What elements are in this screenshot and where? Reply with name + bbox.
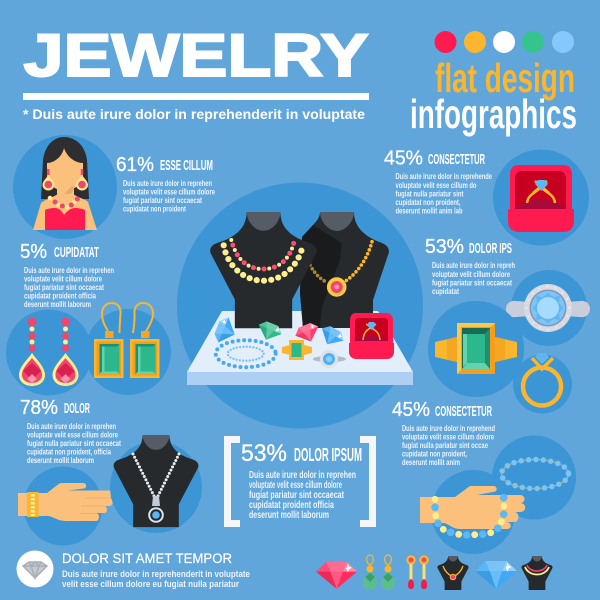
footer badge: white circle with diamond	[16, 550, 54, 588]
right bust with gold necklace	[300, 212, 389, 328]
icon: right drop earring	[52, 318, 78, 386]
stat: 78% dolor: voluptate velit esse cillum dolore	[27, 430, 118, 440]
small ring box	[349, 313, 394, 359]
stat: 45% consectetur top: deserunt mollit anim lab	[396, 206, 463, 216]
stat: 45% consectetur bottom: deserunt mollit anim	[402, 458, 460, 467]
icon: left emerald earring	[94, 303, 124, 378]
footer icon: red diamond	[316, 562, 357, 589]
stat: 78% dolor: DOLOR	[64, 401, 90, 417]
left bust with bead necklaces	[210, 212, 317, 328]
bracket: left	[224, 436, 240, 527]
icon: hand	[420, 486, 525, 529]
panel: centre display	[177, 182, 423, 428]
bracket: right	[360, 436, 376, 527]
panel: emerald earrings	[85, 303, 171, 395]
stat: 45% consectetur bottom: 45%	[392, 399, 430, 421]
icon: diamond ring	[506, 284, 590, 332]
footer icon: pink earring right	[419, 555, 429, 589]
panel: hand with gold bracelet	[18, 466, 113, 546]
stat: 53% dolor ips: voluptate velit cillum dolore	[432, 270, 510, 279]
panel: gold ring	[513, 353, 572, 414]
stat: 53% dolor ipsum: cupidatat proident officia	[249, 500, 334, 511]
stat: 53% dolor ips: DOLOR IPS	[469, 241, 512, 257]
panel: woman	[13, 135, 215, 239]
footer heading: DOLOR SIT AMET TEMPOR	[62, 551, 232, 566]
panel: diamond ring	[506, 270, 590, 346]
stat: 78% dolor: 78%	[20, 397, 58, 419]
stat: 53% dolor ips	[425, 236, 515, 296]
stat: 5% cupidatat: deserunt mollit laborum	[24, 300, 91, 309]
icon: left drop earring	[19, 318, 45, 386]
table	[187, 311, 413, 385]
stat: 53% dolor ipsum: DOLOR IPSUM	[294, 445, 362, 465]
stat: 53% dolor ipsum: 53%	[241, 440, 287, 467]
stat: 45% consectetur top: 45%	[384, 148, 423, 170]
stat: 61% esse cillum: 61%	[116, 154, 154, 176]
footer icon: blue diamond	[475, 561, 517, 589]
stat: 5% cupidatat: voluptate velit cillum dolore	[24, 274, 102, 284]
stat: 78% dolor: deserunt mollit laborum	[27, 456, 94, 465]
footer icon: pink earring left	[406, 555, 416, 589]
stat: 61% esse cillum: cupidatat non proident	[123, 204, 186, 214]
gem: pink	[293, 321, 322, 346]
stat: 45% consectetur top	[384, 148, 492, 216]
stat: 45% consectetur bottom: Duis aute irure dolor in reprehend	[402, 424, 495, 433]
icon: gold ring	[523, 353, 561, 406]
stat: 53% dolor ips: Duis aute irure dolor in repreh	[432, 261, 515, 270]
gem: blue left	[212, 315, 240, 347]
gem: blue right	[316, 323, 346, 350]
subtitle: * Duis aute irure dolor in reprehenderit in voluptate	[23, 107, 366, 122]
footer icon: bust with bead necklaces	[521, 556, 553, 590]
stat: 61% esse cillum: Duis aute irure dolor in reprehen	[123, 179, 212, 188]
stat: 78% dolor	[20, 397, 121, 465]
icon: gold bracelet	[27, 492, 38, 517]
gem: green	[254, 319, 284, 344]
stat: 61% esse cillum: fugiat pariatur sint occaecat	[123, 196, 202, 205]
stat: 53% dolor ips: cupidatat	[432, 287, 459, 296]
stat: 61% esse cillum: ESSE CILLUM	[160, 158, 213, 174]
panel: silver necklace on bust	[110, 435, 202, 533]
panel: emerald ring	[428, 301, 524, 397]
icon: oval bracelet	[502, 460, 568, 488]
stat: 5% cupidatat: CUPIDATAT	[54, 245, 99, 261]
colour palette dots	[434, 31, 574, 53]
footer icon: bust with gold necklace	[437, 556, 469, 590]
stat: 45% consectetur bottom: voluptate velit esse cillum dolore	[402, 432, 494, 442]
stat: 61% esse cillum	[116, 154, 215, 214]
title rule	[23, 93, 369, 100]
stat: 5% cupidatat	[20, 241, 114, 309]
stat: 45% consectetur top: Duis aute irure dolor in reprehende	[396, 172, 492, 181]
stat: 45% consectetur bottom	[392, 399, 495, 467]
panel: bead bracelet	[492, 436, 576, 520]
icon: ring box	[508, 165, 574, 232]
stat: 5% cupidatat: Duis aute irure dolor in reprehen	[24, 266, 114, 275]
footer icon: green earring left	[363, 555, 377, 590]
icon: emerald ring	[435, 323, 517, 374]
stat: 53% dolor ips: 53%	[425, 236, 464, 258]
footer icon: green earring right	[381, 555, 395, 590]
stat: 53% dolor ips: fugiat pariatur sint occaecat	[432, 278, 512, 288]
icon: woman with jewelry	[33, 137, 97, 230]
stat: 45% consectetur top: CONSECTETUR	[428, 152, 485, 168]
icon: right emerald earring	[130, 303, 160, 378]
footer text	[62, 569, 250, 590]
icon: chain and pendant	[133, 454, 179, 522]
stat: 78% dolor: fugiat nulla pariatur sint occaecat	[27, 439, 121, 448]
small emerald ring	[282, 340, 312, 360]
small diamond ring	[313, 350, 346, 368]
stat: 53% dolor ipsum	[241, 440, 362, 521]
title: JEWELRY	[24, 22, 368, 89]
stat: 53% dolor ipsum: fugiat pariatur sint occaecat	[249, 490, 344, 501]
stat: 45% consectetur top: fugiat nulla pariatur sint	[396, 190, 464, 198]
stat: 45% consectetur top: voluptate velit esse cillum do	[396, 181, 477, 190]
stat: 78% dolor: cupidatat non proident, officia	[27, 448, 111, 456]
icon: bust	[114, 435, 198, 527]
stat: 61% esse cillum: voluptate velit esse cillum dolore	[123, 188, 215, 196]
stat: 45% consectetur bottom: fugiat nulla pariatur sint occae	[402, 441, 488, 450]
stat: 5% cupidatat: cupidatat proident officia	[24, 292, 96, 300]
panel: hand with bead bracelet	[420, 470, 525, 554]
stat: 53% dolor ipsum: voluptate velit esse cillum dolore	[249, 480, 342, 491]
stat: 5% cupidatat: 5%	[20, 241, 47, 263]
bracelet on table	[216, 340, 276, 367]
stat: 45% consectetur bottom: CONSECTETUR	[435, 404, 492, 420]
stat: 5% cupidatat: fugiat pariatur sint occaecat	[24, 283, 104, 292]
icon: hand	[18, 483, 113, 521]
panel: pink drop earrings	[6, 310, 92, 396]
footer text: Duis aute irure dolor in reprehenderit in voluptate	[62, 569, 250, 580]
stat: 45% consectetur top: cupidatat non proident,	[396, 198, 460, 207]
footer text: velit esse cillum dolore eu fugiat nulla pariatur	[62, 579, 239, 590]
stat: 53% dolor ipsum: Duis aute irure dolor in reprehen	[249, 470, 356, 481]
panel: ring box	[493, 150, 589, 246]
stat: 53% dolor ipsum: deserunt mollit laborum	[249, 510, 329, 521]
stat: 78% dolor: Duis aute irure dolor in reprehen	[27, 422, 116, 431]
icon: worn bracelet	[431, 494, 508, 539]
stat: 45% consectetur bottom: cupidatat non proident,	[402, 450, 467, 458]
